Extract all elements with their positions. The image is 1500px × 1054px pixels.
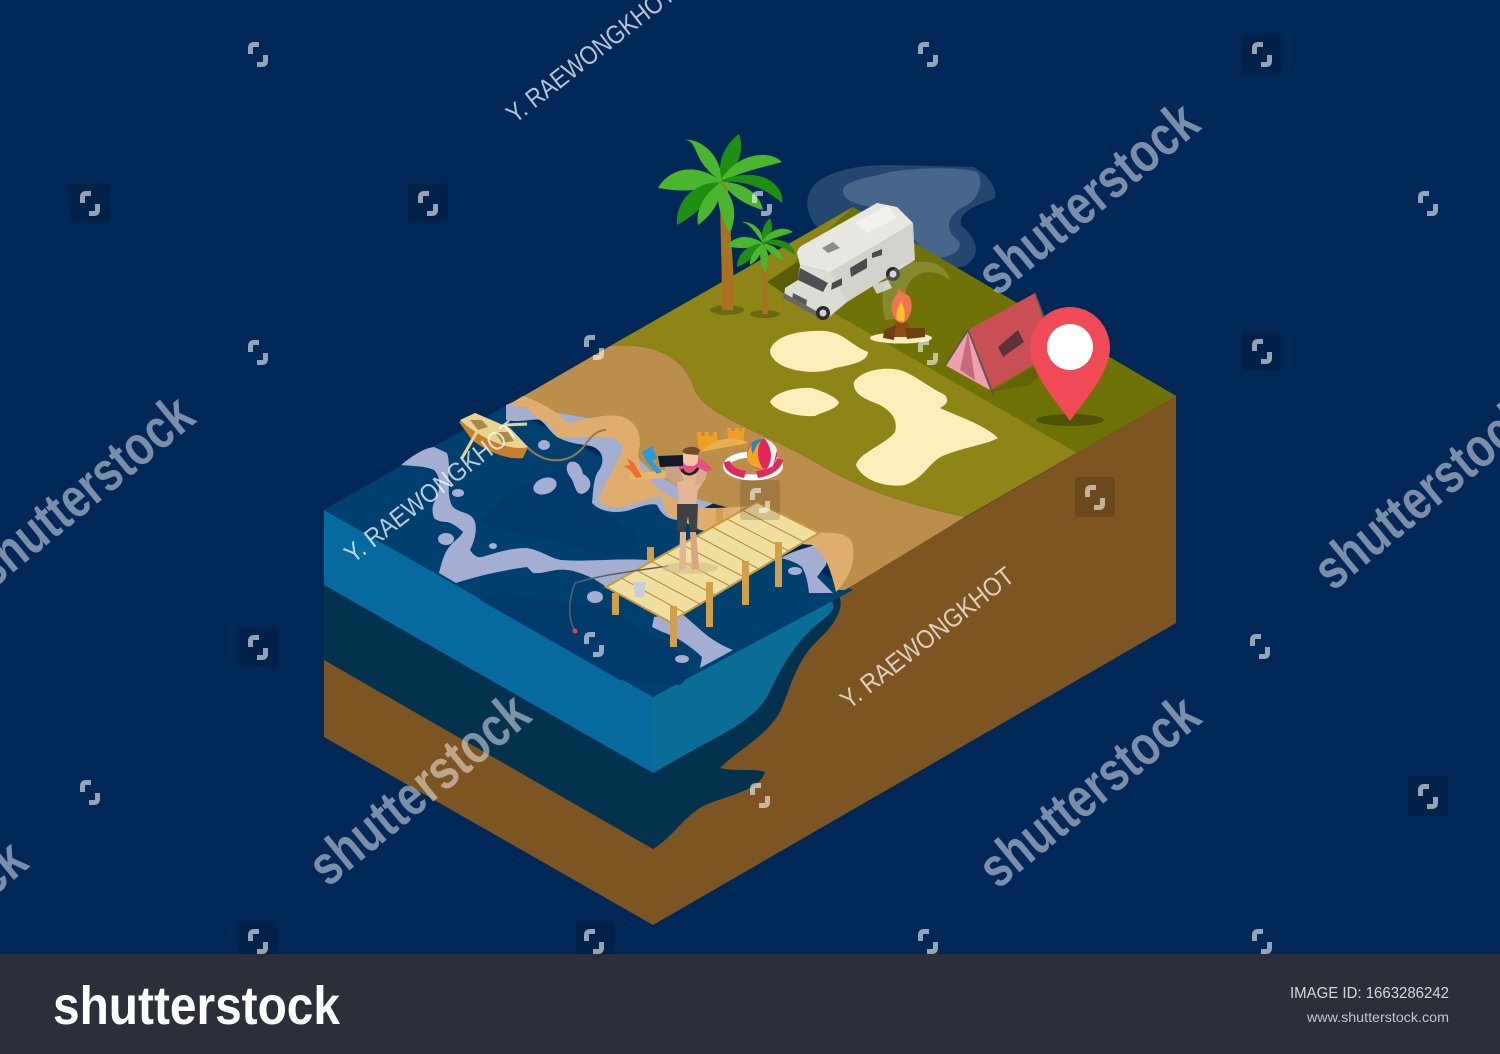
map pin bbox=[1030, 307, 1110, 426]
shutterstock watermarks: shutterstock bbox=[965, 88, 1211, 306]
grass bbox=[610, 207, 1176, 517]
small palm tree bbox=[727, 218, 795, 318]
planks bbox=[621, 510, 804, 613]
left face: soil layer bbox=[324, 660, 653, 925]
dark grass strip bbox=[782, 207, 1176, 453]
right face: deep water bbox=[653, 593, 841, 849]
deck bbox=[606, 502, 819, 622]
right face: water bbox=[653, 601, 833, 773]
shutterstock watermarks: shutterstock bbox=[296, 679, 542, 897]
rear posts bbox=[647, 508, 723, 567]
contributor watermarks: Y. RAEWONGKHOT bbox=[338, 415, 524, 569]
orange starfish bbox=[623, 458, 642, 478]
blue spade bbox=[642, 446, 662, 474]
small logo marks bbox=[82, 44, 1436, 952]
rowing boat bbox=[459, 413, 528, 458]
water foam bbox=[401, 395, 833, 668]
website: www.shutterstock.com bbox=[1306, 1009, 1449, 1025]
campfire bbox=[870, 262, 950, 344]
left face: deep layer bbox=[324, 585, 653, 849]
wooden pier bbox=[570, 502, 819, 647]
front posts bbox=[612, 542, 782, 647]
photographer bbox=[658, 447, 718, 574]
beach ball bbox=[747, 439, 777, 469]
red tent bbox=[945, 293, 1060, 396]
rope bbox=[527, 430, 606, 460]
life ring bbox=[724, 454, 783, 478]
image id: IMAGE ID: 1663286242 bbox=[1290, 985, 1449, 1002]
sand tray bbox=[628, 470, 667, 480]
footer logo: shutterstock bbox=[53, 976, 341, 1036]
camper van bbox=[767, 203, 915, 320]
sand castles bbox=[697, 428, 748, 452]
sand patches bbox=[770, 331, 998, 486]
bobber bbox=[572, 628, 578, 634]
water surface bbox=[324, 406, 853, 697]
contributor watermarks bbox=[338, 0, 1020, 715]
wet sand bbox=[508, 396, 853, 592]
right face: soil bbox=[653, 396, 1176, 925]
beach toys bbox=[623, 428, 783, 480]
beach sand bbox=[508, 345, 965, 590]
smoke cloud bbox=[807, 165, 995, 268]
isometric block bbox=[324, 207, 1176, 925]
big palm tree bbox=[658, 134, 782, 315]
left face: water layer bbox=[324, 510, 653, 773]
contributor watermarks: Y. RAEWONGKHOT bbox=[834, 561, 1020, 715]
bucket bbox=[633, 582, 646, 597]
foam bubbles bbox=[438, 440, 802, 663]
shutterstock watermarks: shutterstock bbox=[966, 681, 1212, 899]
darker water patches bbox=[480, 470, 688, 685]
fishing rod bbox=[570, 566, 668, 631]
footer bar bbox=[0, 954, 1500, 1054]
